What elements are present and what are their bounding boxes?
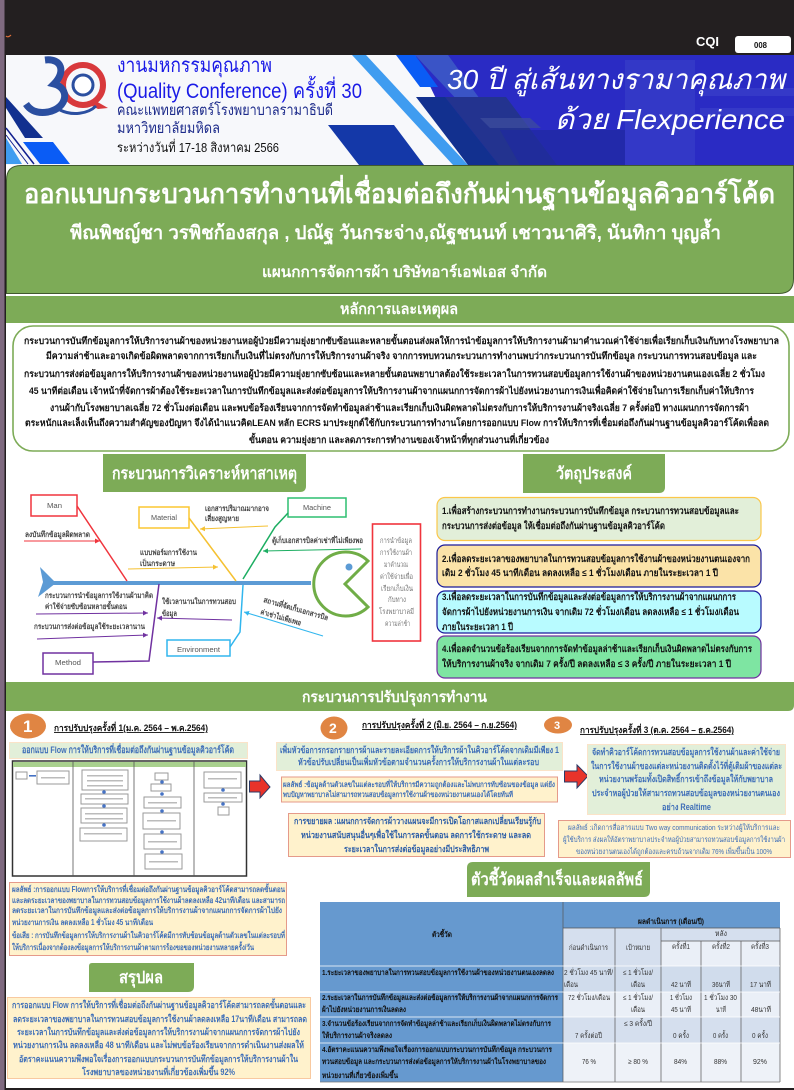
- row 2: 1 ชั่วโมง 30: [704, 992, 737, 1002]
- branch: Material: เสี่ยงสูญหาย: [205, 512, 239, 524]
- branch: Method: กระบวนการส่งต่อข้อมูลใช้ระยะเวลานาน: [34, 622, 146, 632]
- row 1: 42 นาที: [671, 980, 691, 989]
- text block: conclusion: ลดระยะเวลาของพยาบาลในการทวนสอบข้อมูลการใช้งานผ้าลดลงเหลือ 17นาที/เดือน สามารถลด: [13, 1013, 307, 1025]
- row 4: ≥ 80 %: [628, 1057, 648, 1066]
- table header: เป้าหมาย: [626, 943, 650, 952]
- branch: Machine: [243, 498, 363, 579]
- conference name text: งานมหกรรมคุณภาพ: [117, 55, 272, 78]
- heading: root cause analysis: [103, 454, 306, 492]
- row 2: 72 ชั่วโมง/เดือน: [568, 992, 610, 1002]
- round 1 results: ข้อเสีย : การบันทึกข้อมูลการให้บริการงานผ้าในคิวอาร์โค้ดมีการทับซ้อนข้อมูลด้านตัวเลขในแต่ละรอบที่: [12, 929, 285, 941]
- row 3: 7 ครั้งต่อปี: [575, 1030, 602, 1040]
- objective 2: เดิม 2 ชั่วโมง 45 นาที/เดือน ลดลงเหลือ ≤ 1 ชั่วโมง/เดือน ภายในระยะเวลา 1 ปี: [442, 565, 718, 579]
- badge 2: 2: [329, 720, 337, 736]
- text block: rationale: ขั้นตอน ความยุ่งยาก และลดภาระการทำงานของเจ้าหน้าที่ทุกส่วนงานที่เกี่ยวข้อง: [249, 432, 549, 446]
- table header: ครั้งที่2: [712, 941, 730, 951]
- scale-up box: ระยะเวลาในการส่งต่อข้อมูลอย่างมีประสิทธิภาพ: [344, 843, 489, 855]
- round 3 action: อย่าง Realtime: [662, 802, 711, 812]
- table header: [432, 917, 769, 952]
- objective 2: [437, 545, 761, 587]
- row 4: 76 %: [582, 1057, 596, 1066]
- scale-up box: [288, 814, 544, 856]
- branch: Environment: สถานที่จัดเก็บเอกสารบิล: [262, 593, 330, 622]
- round 1 results: และลดระยะเวลาของพยาบาลในการทวนสอบข้อมูลการใช้งานผ้าลดลงเหลือ 42นาที/เดือน และสามารถ: [12, 895, 285, 906]
- text block: rationale: มีความล่าช้าและอาจเกิดข้อผิดพลาดจากการเรียกเก็บเงินที่ไม่ตรงกับการให้บริการงานผ้าจริง จากการทบทวนกระบวนการทำงานพบว่ากระบวนการบันทึกข้อมูล กระบวนการทวนสอบข้อมูล และ: [46, 348, 757, 363]
- problem box: ความล่าช้า: [385, 619, 410, 628]
- round 3 heading: การปรับปรุงครั้งที่ 3 (ต.ค. 2564 – ธ.ค.2564): [580, 723, 734, 736]
- table header: ครั้งที่3: [751, 941, 769, 951]
- objective 4: [437, 636, 761, 678]
- branch: Method: Method: [55, 660, 81, 667]
- row 4: หน่วยงานที่เกี่ยวข้องเพิ่มขึ้น: [322, 1069, 399, 1080]
- heading: improvement process: กระบวนการปรับปรุงการทำงาน: [302, 689, 488, 707]
- table backgrounds: [320, 902, 780, 1082]
- problem box: กับทาง: [388, 595, 406, 604]
- text block: conclusion: โรงพยาบาลของหน่วยงานที่เกี่ยวข้องเพิ่มขึ้น 92%: [81, 1065, 235, 1077]
- row 4: 88%: [714, 1057, 727, 1066]
- table: KPI results: [320, 902, 780, 1082]
- heading: rationale: [6, 296, 794, 323]
- row 1: 2 ชั่วโมง 45 นาที/: [564, 967, 614, 977]
- heading: objectives: [523, 454, 665, 493]
- heading: objectives: วัตถุประสงค์: [556, 463, 632, 484]
- text block: conclusion: [8, 998, 310, 1078]
- round 1 action: ออกแบบ Flow การให้บริการที่เชื่อมต่อถึงกันผ่านฐานข้อมูลคิวอาร์โค้ด: [22, 742, 234, 757]
- spine: [38, 567, 311, 597]
- heading: rationale: หลักการและเหตุผล: [340, 301, 458, 319]
- row 1: 36นาที: [712, 980, 730, 989]
- objective 1: กระบวนการส่งต่อข้อมูล ให้เชื่อมต่อถึงกันผ่านฐานข้อมูลคิวอาร์โค้ด: [442, 518, 665, 533]
- table header: ก่อนดำเนินการ: [569, 943, 608, 952]
- heading: conclusion: [89, 963, 194, 992]
- objective 3: [437, 589, 761, 633]
- row 4: 84%: [674, 1057, 687, 1066]
- conference name text: ระหว่างวันที่ 17-18 สิงหาคม 2566: [117, 139, 279, 155]
- objective 1: 1.เพื่อสร้างกระบวนการทำงานกระบวนการบันทึกข้อมูล กระบวนการทวนสอบข้อมูลและ: [442, 503, 739, 518]
- row 3: ให้บริการงานผ้าจริงลดลง: [322, 1031, 392, 1040]
- objective 3: 3.เพื่อลดระยะเวลาในการบันทึกข้อมูลและส่งต่อข้อมูลการให้บริการงานผ้าจากแผนกการ: [442, 589, 737, 604]
- objective 4: ให้บริการงานผ้าจริง จากเดิม 7 ครั้ง/ปี ลดลงเหลือ ≤ 3 ครั้ง/ปี ภายในระยะเวลา 1 ปี: [442, 656, 731, 670]
- arrow: round 2 to round 3: [564, 765, 588, 788]
- round 1 results: ให้บริการเนื่องจากต้องลงข้อมูลการให้บริการงานผ้าตามการร้องขอของหน่วยงานหลายครั้ง/วัน: [12, 941, 254, 953]
- row 1: 17 นาที: [750, 980, 771, 989]
- objectives list: [437, 498, 761, 678]
- round 2 action: หัวข้อปรับเปลี่ยนเป็นเพิ่มหัวข้อตามจำนวนครั้งการให้บริการงานผ้าในแต่ละรอบ: [298, 755, 539, 767]
- row 3: 0 ครั้ง: [752, 1030, 768, 1040]
- branch: Machine: Machine: [303, 505, 331, 512]
- text block: conclusion: ระยะเวลาในการบันทึกข้อมูลและส่งต่อข้อมูลการให้บริการงานผ้าจากแผนกการจัดการผ้าไปยัง: [17, 1026, 300, 1038]
- row 1: [322, 967, 771, 989]
- round 2 heading: การปรับปรุงครั้งที่ 2 (มิ.ย. 2564 – ก.ย.2564): [362, 718, 517, 731]
- badge 1: [10, 714, 46, 738]
- branch: Method: ข้อมูล: [162, 609, 177, 619]
- round 3 results: [558, 820, 790, 858]
- row 2: 2.ระยะเวลาในการบันทึกข้อมูลและส่งต่อข้อมูลการให้บริการงานผ้าจากแผนกการจัดการ: [322, 993, 559, 1003]
- problem box: [372, 524, 420, 641]
- panel: improvement round 3: [544, 716, 790, 858]
- row 2: นาที: [716, 1005, 726, 1014]
- heading: conclusion: สรุปผล: [119, 968, 163, 988]
- branch: Environment: Environment: [177, 647, 220, 654]
- conference slogan: ด้วย Flexperience: [555, 104, 785, 135]
- fish head: [314, 552, 368, 616]
- round 1 results: หน่วยงานการเงิน ลดลงเหลือ 1 ชั่วโมง 45 นาที/เดือน: [12, 916, 153, 927]
- round 3 action: [588, 744, 786, 814]
- table header: ครั้งที่1: [672, 941, 690, 951]
- round 2 results: ผลลัพธ์ :ข้อมูลด้านตัวเลขในแต่ละรอบที่ให้บริการมีความถูกต้องและไม่พบการทับซ้อนของข้อมูล แต่ยัง: [283, 778, 555, 790]
- row 4: ทวนสอบข้อมูล และกระบวนการส่งต่อข้อมูลการให้บริการงานผ้าในโรงพยาบาลของ: [322, 1056, 546, 1067]
- problem box: เรียกเก็บเงิน: [381, 583, 413, 593]
- branch: Method: ใช้เวลานานในการทวนสอบ: [162, 597, 236, 606]
- branch: Material: [128, 504, 269, 581]
- badge 1: 1: [23, 717, 32, 736]
- CQI label and code box: 008: [754, 41, 768, 50]
- branch: Material: แบบฟอร์มการใช้งาน: [140, 548, 198, 557]
- text block: rationale: [13, 326, 789, 451]
- flowchart thumbnail: [12, 761, 246, 876]
- scale-up box: หน่วยงานสนับสนุนอื่นๆเพื่อใช้ในการลดขั้นตอน ลดการใช้กระดาษ และลด: [301, 828, 531, 841]
- heading: root cause analysis: กระบวนการวิเคราะห์หาสาเหตุ: [112, 463, 297, 484]
- round 2 results: พบปัญหาพยาบาลไม่สามารถทวนสอบข้อมูลการใช้งานผ้าของหน่วยงานตนเองได้โดยทันที: [283, 789, 513, 800]
- table header: ตัวชี้วัด: [432, 928, 452, 939]
- branch: Machine: ตู้เก็บเอกสารบิลค่าเช่าที่ไม่เพียงพอ: [272, 534, 363, 546]
- branch: Environment: [167, 585, 330, 656]
- row 1: 1.ระยะเวลาของพยาบาลในการทวนสอบข้อมูลการใช้งานผ้าของหน่วยงานตนเองลดลง: [322, 968, 554, 978]
- title panel: [6, 166, 794, 294]
- branch: Man: Man: [47, 503, 62, 510]
- branch: Material: เอกสารปริมาณมากอาจ: [205, 504, 269, 513]
- row 3: 0 ครั้ง: [713, 1030, 728, 1040]
- badge 3: [544, 716, 572, 734]
- round 2 action: เพิ่มหัวข้อการกรอกรายการผ้าและรายละเอียดการให้บริการผ้าในคิวอาร์โค้ดจากเดิมมีเพียง 1: [280, 743, 559, 755]
- row 3: [322, 1018, 768, 1040]
- round 2 results: [282, 777, 558, 802]
- row 2: เดือน: [631, 1005, 645, 1014]
- round 1 action: [10, 742, 248, 758]
- row 4: 4.อัตราคะแนนความพึงพอใจเรื่องการออกแบบกระบวนการบันทึกข้อมูล กระบวนการ: [322, 1043, 553, 1055]
- text block: conclusion: อัตราคะแนนความพึงพอใจเรื่องการออกแบบกระบวนการบันทึกข้อมูลการให้บริการงานผ้าใน: [19, 1052, 299, 1065]
- branch: Man: [24, 495, 127, 581]
- round 1 results: [10, 882, 286, 956]
- panel: improvement round 2: [276, 716, 562, 856]
- text block: conclusion: การออกแบบ Flow การให้บริการที่เชื่อมต่อถึงกันผ่านฐานข้อมูลคิวอาร์โค้ดสามารถลดขั้นตอนและ: [12, 998, 306, 1011]
- row 4: [322, 1043, 767, 1080]
- problem box: โรงพยาบาลมี: [379, 607, 414, 616]
- round 1 results: ลดระยะเวลาในการบันทึกข้อมูลและส่งต่อข้อมูลการให้บริการงานผ้าจากแผนกการจัดการผ้าไปยัง: [12, 905, 282, 916]
- row 2: ผ้าไปยังหน่วยงานการเงินลดลง: [322, 1004, 406, 1014]
- chart: fishbone diagram: [24, 495, 420, 674]
- problem box: การนำข้อมูล: [380, 536, 412, 545]
- row 3: 3.จำนวนข้อร้องเรียนจากการจัดทำข้อมูลล่าช้าและเรียกเก็บเงินผิดพลาดไม่ตรงกับการ: [322, 1018, 552, 1029]
- CQI label and code box: CQI: [696, 34, 719, 49]
- badge 3: 3: [554, 720, 560, 732]
- row 2: [322, 992, 771, 1014]
- conference name text: คณะแพทยศาสตร์โรงพยาบาลรามาธิบดี: [117, 101, 333, 119]
- objective 3: จัดการผ้าไปยังหน่วยงานการเงิน จากเดิม 72 ชั่วโมง/เดือน ลดลงเหลือ ≤ 1 ชั่วโมง/เดือน: [442, 604, 739, 618]
- conference name text: มหาวิทยาลัยมหิดล: [117, 120, 220, 137]
- authors: พีณพิชญ์ชา วรพิชก้องสกุล , ปณัฐ วันกระจ่าง,ณัฐชนนท์ เชาวนาศิริ, นันทิกา บุญล้ำ: [70, 218, 721, 246]
- round 1 heading: การปรับปรุงครั้งที่ 1(ม.ค. 2564 – พ.ค.2564): [54, 721, 208, 734]
- branch: Method: [34, 584, 236, 674]
- arrow: round 1 to round 2: [250, 775, 270, 798]
- CQI label and code box: [696, 34, 791, 53]
- table header: หลัง: [715, 929, 727, 938]
- branch: Environment: ค่าเช่าไม่เพียงพอ: [259, 606, 303, 627]
- row 4: 92%: [753, 1057, 767, 1066]
- problem box: มาคำนวณ: [384, 560, 408, 569]
- row 1: เดือน: [631, 980, 645, 989]
- branch: Method: ค่าใช้จ่ายซับซ้อนหลายขั้นตอน: [45, 600, 128, 611]
- text block: conclusion: หน่วยงานการเงิน ลดลงเหลือ 48 นาที/เดือน และไม่พบข้อร้องเรียนจากการดำเนินงานส่งผลให้: [13, 1039, 304, 1050]
- department: แผนกการจัดการผ้า บริษัทอาร์เอฟเอส จำกัด: [262, 263, 547, 281]
- panel: improvement round 1: [10, 714, 286, 956]
- objective 1: [437, 498, 761, 540]
- round 2 action: [276, 742, 562, 770]
- row 2: 48นาที: [751, 1005, 771, 1014]
- heading: improvement process: [6, 682, 794, 711]
- problem box: การใช้งานผ้า: [380, 548, 412, 557]
- problem box: ค่าใช้จ่ายเพื่อ: [380, 571, 413, 581]
- conference name text: [117, 55, 362, 155]
- heading: KPIs and outcomes: [467, 862, 650, 897]
- row 3: 0 ครั้ง: [673, 1030, 689, 1040]
- objective 3: ภายในระยะเวลา 1 ปี: [442, 621, 513, 633]
- table header: ผลดำเนินการ (เดือน/ปี): [638, 917, 704, 926]
- row 2: 45 นาที: [671, 1005, 691, 1014]
- row 1: ≤ 1 ชั่วโมง/: [623, 967, 654, 977]
- scale-up box: การขยายผล :แผนกการจัดการผ้าวางแผนจะมีการเปิดโอกาสแลกเปลี่ยนเรียนรู้กับ: [294, 814, 541, 827]
- branch: Material: เป็นกระดาษ: [140, 558, 175, 568]
- heading: KPIs and outcomes: ตัวชี้วัดผลสำเร็จและผลลัพธ์: [471, 866, 643, 889]
- badge 2: [320, 716, 348, 740]
- row 1: เดือน: [564, 980, 578, 989]
- round 1 results: ผลลัพธ์ :การออกแบบ Flowการให้บริการที่เชื่อมต่อถึงกันผ่านฐานข้อมูลคิวอาร์โค้ดสามารถลดขั้นตอน: [12, 883, 285, 895]
- branch: Method: กระบวนการนำข้อมูลการใช้งานผ้ามาคิด: [45, 591, 153, 601]
- row 2: ≤ 1 ชั่วโมง/: [623, 992, 654, 1002]
- row 2: 1 ชั่วโมง: [670, 992, 692, 1002]
- conference banner: [6, 55, 794, 165]
- conference slogan: [447, 64, 788, 135]
- row 3: ≤ 3 ครั้ง/ปี: [624, 1018, 652, 1028]
- conference name text: (Quality Conference) ครั้งที่ 30: [117, 76, 362, 103]
- logo: 30 years Q: [26, 60, 108, 113]
- branch: Material: Material: [151, 515, 177, 522]
- branch: Man: ลงบันทึกข้อมูลผิดพลาด: [25, 530, 90, 540]
- conference slogan: 30 ปี สู่เส้นทางรามาคุณภาพ: [447, 64, 788, 97]
